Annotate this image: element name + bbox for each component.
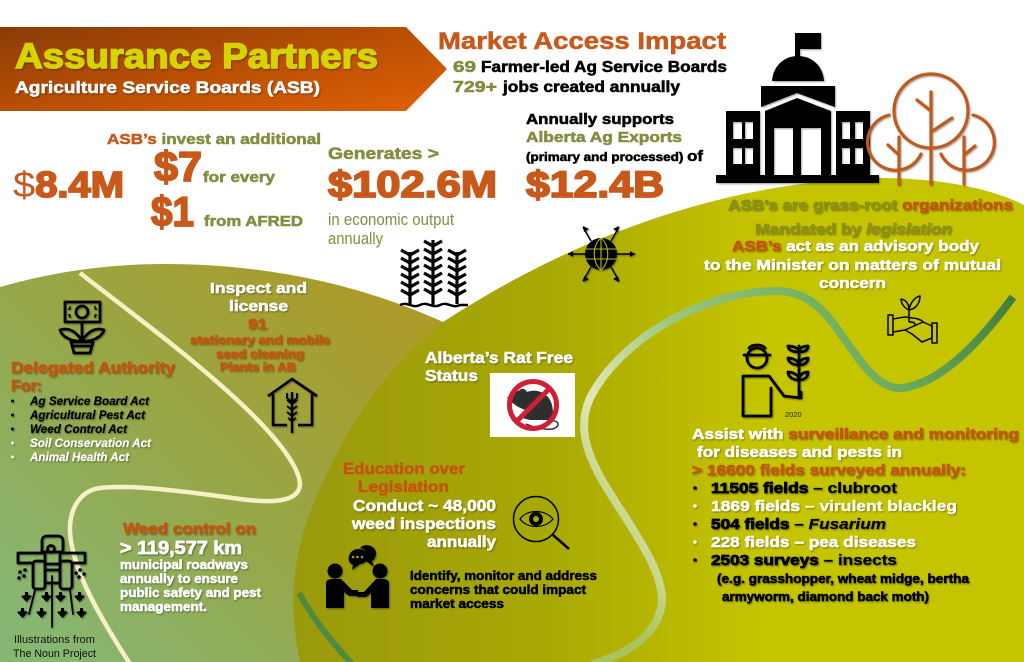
act list: Agricultural Pest Act xyxy=(29,408,146,422)
icon: tractor sprayer xyxy=(17,536,87,627)
weed description line 1: municipal roadways xyxy=(120,558,248,572)
icon: hand with seedling xyxy=(888,296,937,343)
boards statistic: 69 xyxy=(453,59,476,76)
grass-root text block xyxy=(704,197,1013,292)
weed description line 3: public safety and pest xyxy=(120,586,262,600)
icon: farmer holding wheat xyxy=(743,345,808,416)
icon: magnifier eye xyxy=(514,496,569,549)
green wave ribbon xyxy=(584,291,1013,662)
insect examples: (e.g. grasshopper, wheat midge, bertha xyxy=(717,572,970,586)
insects item: 2503 surveys – insects xyxy=(711,552,897,569)
identify text block xyxy=(410,569,597,611)
rat free block xyxy=(425,350,575,437)
credit line 1: Illustrations from xyxy=(14,634,95,646)
icon: legislature building xyxy=(716,33,879,183)
1 dollar: $1 xyxy=(151,188,194,235)
economic output block xyxy=(328,144,497,248)
8.4M figure: $8.4M xyxy=(13,164,124,205)
subtitle: Agriculture Service Boards (ASB) xyxy=(15,78,320,97)
delegated authority block xyxy=(11,360,175,464)
seed cleaning: seed cleaning xyxy=(216,347,304,361)
act list: Weed Control Act xyxy=(30,422,128,436)
icon: money flower xyxy=(60,302,104,353)
alberta ag exports: Alberta Ag Exports xyxy=(526,129,682,146)
cream curved ribbon xyxy=(70,273,300,662)
weed description line 2: annually to ensure xyxy=(120,572,238,586)
insect examples line 2: armyworm, diamond back moth) xyxy=(722,590,929,604)
background: left green hill xyxy=(0,264,443,662)
output caption: in economic output xyxy=(328,210,454,229)
advisory body line: ASB’s act as an advisory body xyxy=(732,238,980,255)
dark green ribbon end xyxy=(299,593,352,662)
title banner xyxy=(0,27,447,111)
12.4B figure: $12.4B xyxy=(526,164,664,205)
icon: wheat xyxy=(400,240,468,307)
boards label: Farmer-led Ag Service Boards xyxy=(481,59,727,76)
identify line 2: concerns that could impact xyxy=(410,583,587,597)
act list: Animal Health Act xyxy=(29,450,130,464)
market access heading: Market Access Impact xyxy=(438,28,726,55)
for every: for every xyxy=(203,169,276,186)
invest heading: ASB’s invest an additional xyxy=(107,131,321,148)
background: right yellow-green hill xyxy=(293,178,1024,662)
from AFRED: from AFRED xyxy=(204,213,303,230)
plants in AB: Plants in AB xyxy=(220,360,296,374)
inspections line 2: weed inspections xyxy=(351,516,496,533)
surveillance text block xyxy=(692,426,1019,604)
generates label: Generates > xyxy=(328,144,439,163)
identify line 3: market access xyxy=(410,597,504,611)
market access impact block xyxy=(438,28,727,96)
91 plants: 91 xyxy=(248,316,267,333)
mandated by legislation: Mandated by legislation xyxy=(755,221,952,238)
jobs statistic: 729+ xyxy=(453,79,497,96)
fields surveyed line: > 16600 fields surveyed annually: xyxy=(692,462,966,479)
icon: globe with arrows xyxy=(568,226,635,282)
stationary and mobile: stationary and mobile xyxy=(190,333,330,347)
illustrations credit xyxy=(13,634,96,660)
act list xyxy=(11,394,152,464)
clubroot item: 11505 fields – clubroot xyxy=(711,480,897,497)
investment block xyxy=(13,131,321,235)
km figure: > 119,577 km xyxy=(120,538,242,558)
status heading: Status xyxy=(425,368,478,385)
delegated heading: Delegated Authority xyxy=(11,360,175,377)
inspections line 1: Conduct ~ 48,000 xyxy=(353,498,496,515)
jobs label: jobs created annually xyxy=(502,79,680,96)
inspections line 3: annually xyxy=(427,534,496,551)
icon: trees xyxy=(868,74,994,184)
blackleg item: 1869 fields – virulent blackleg xyxy=(711,498,957,515)
for label: For: xyxy=(11,378,42,395)
identify line 1: Identify, monitor and address xyxy=(410,569,597,583)
fusarium item: 504 fields – Fusarium xyxy=(711,516,886,533)
weed control block xyxy=(120,521,262,614)
inspect and license block xyxy=(190,280,330,374)
surveillance line: Assist with surveillance and monitoring xyxy=(692,426,1019,443)
exports block xyxy=(526,111,704,205)
weed control heading: Weed control on xyxy=(123,521,256,538)
education heading: Education over xyxy=(343,461,465,478)
7 dollars: $7 xyxy=(154,143,202,190)
title: Assurance Partners xyxy=(15,37,378,76)
rat free heading: Alberta’s Rat Free xyxy=(425,350,573,367)
inspect heading: Inspect and xyxy=(210,280,307,297)
grass-root heading: ASB’s are grass-root organizations xyxy=(728,197,1013,214)
farmer year label: 2020 xyxy=(785,410,802,419)
102.6M figure: $102.6M xyxy=(328,164,497,205)
act list: Soil Conservation Act xyxy=(30,436,152,450)
output caption line 2: annually xyxy=(328,229,383,248)
annually supports: Annually supports xyxy=(526,111,674,128)
icon: wheat house xyxy=(268,379,317,433)
legislation heading: Legislation xyxy=(358,479,449,496)
diseases and pests line: for diseases and pests in xyxy=(697,444,902,461)
minister line: to the Minister on matters of mutual xyxy=(704,257,1001,274)
credit line 2: The Noun Project xyxy=(13,648,96,660)
concern line: concern xyxy=(819,275,886,292)
license heading: license xyxy=(229,298,288,315)
icon: two people with speech bubbles xyxy=(326,545,389,608)
weed description line 4: management. xyxy=(120,600,207,614)
education block xyxy=(343,461,496,551)
act list: Ag Service Board Act xyxy=(29,394,150,408)
pea diseases item: 228 fields – pea diseases xyxy=(711,534,916,551)
icon: no rats sign xyxy=(490,373,575,437)
primary and processed: (primary and processed) of xyxy=(526,148,704,165)
